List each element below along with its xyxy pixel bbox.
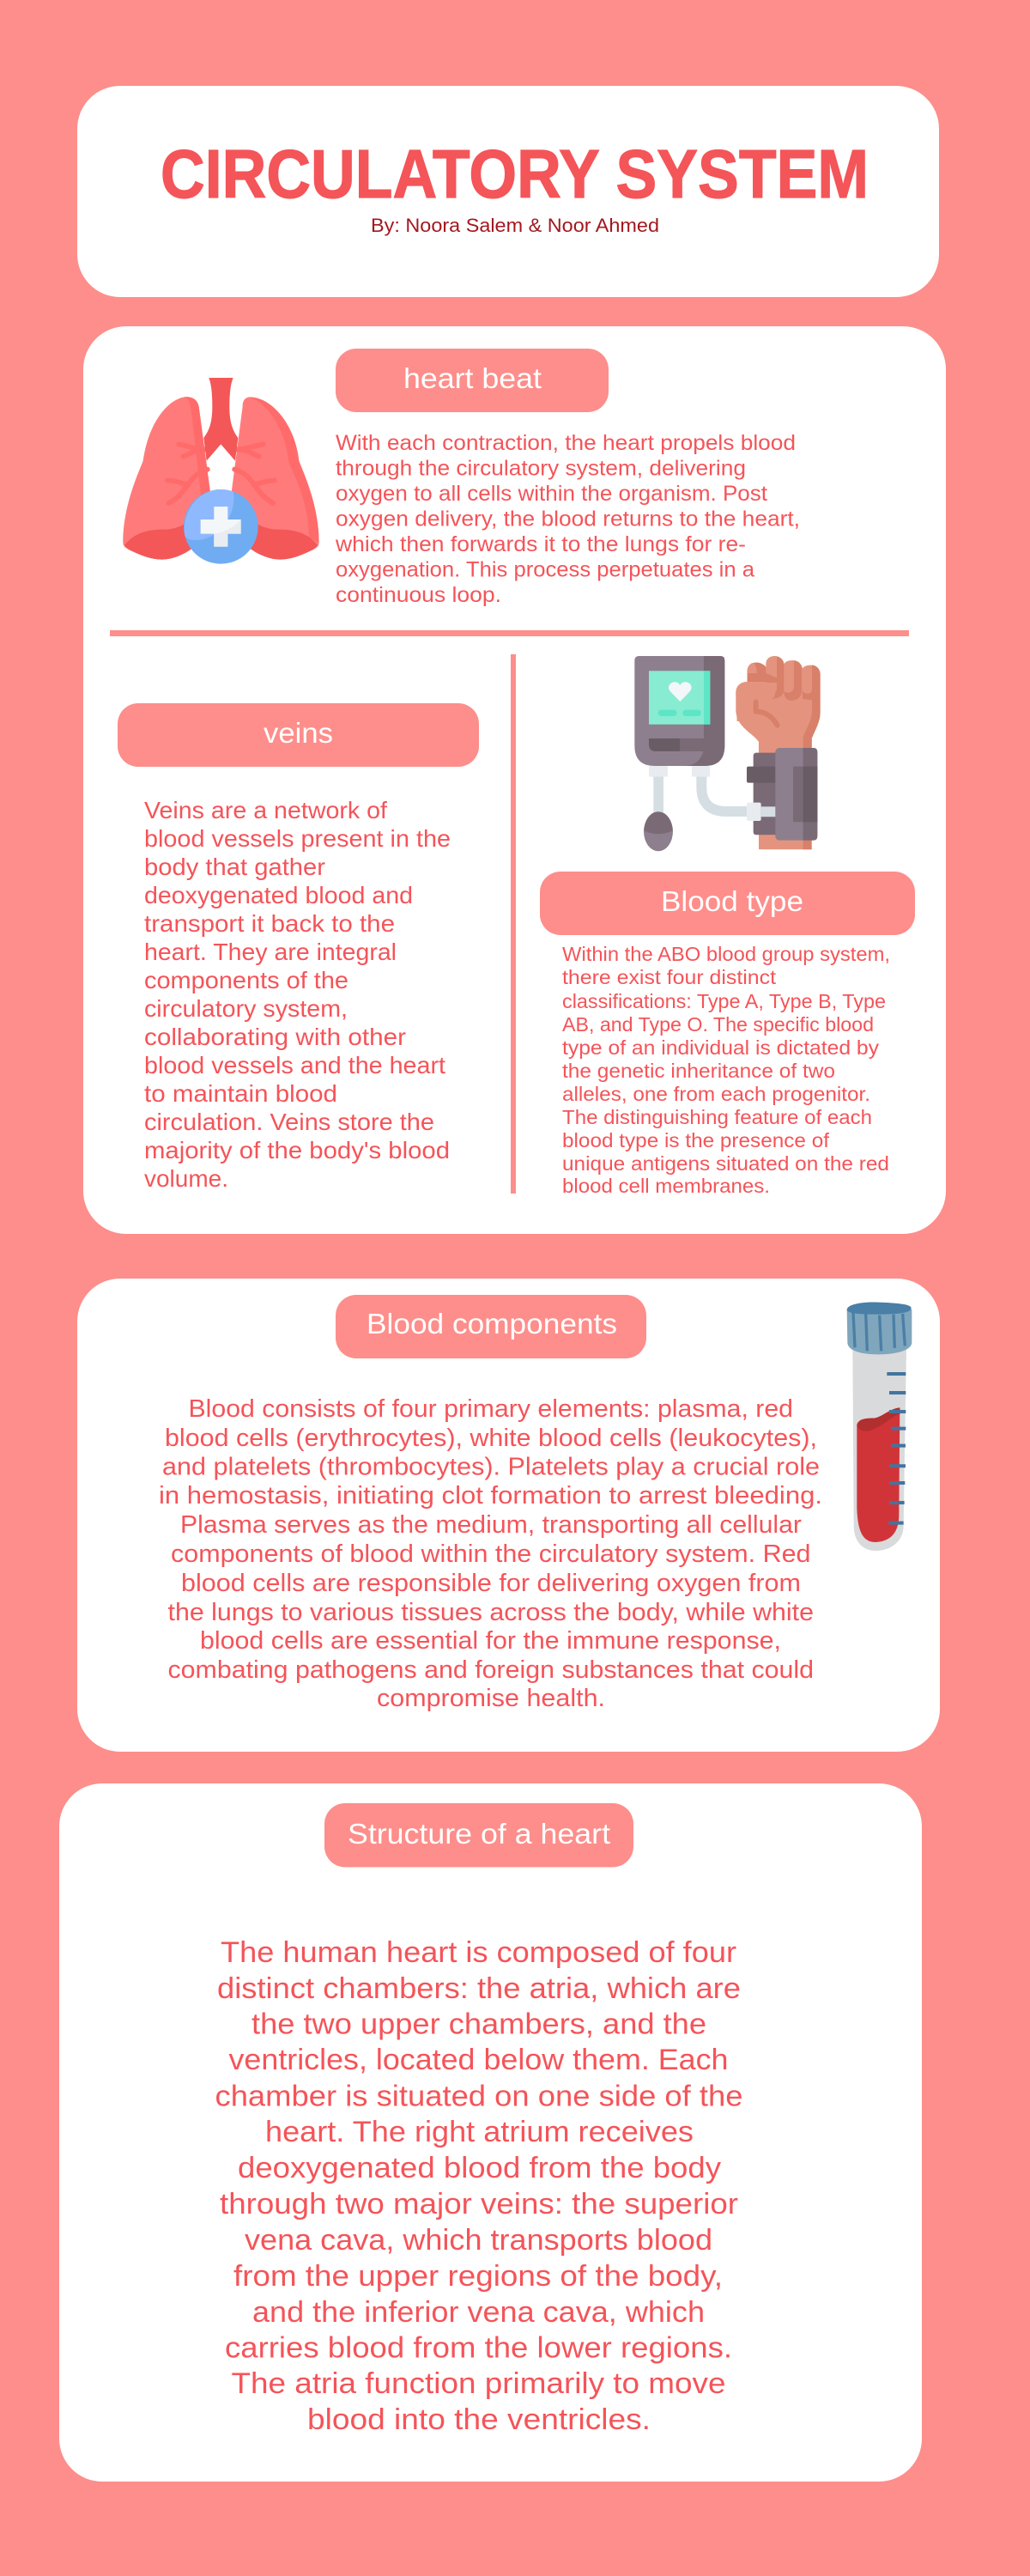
panel: title card [77, 86, 939, 297]
text: blood type description [562, 943, 890, 1197]
text: veins description: collaborating with other [144, 1024, 406, 1050]
text: veins description: Veins are a network of [144, 797, 387, 823]
text: heart beat description: through the circulatory system, delivering [336, 457, 746, 481]
heading: structure of a heart [324, 1803, 633, 1867]
heading: heart beat [336, 349, 609, 412]
text: blood type description: unique antigens situated on the red [562, 1152, 889, 1175]
text: blood components description: and platelets (thrombocytes). Platelets play a crucial role [162, 1453, 820, 1480]
text: blood type description: blood cell membranes. [562, 1175, 770, 1197]
text: structure of a heart description [215, 1936, 743, 2436]
text: heart beat description [335, 431, 800, 607]
heading: blood components: Blood components [367, 1308, 617, 1340]
text: blood components description: in hemostasis, initiating clot formation to arrest bleeding. [159, 1482, 822, 1510]
panel: blood components [77, 1279, 940, 1752]
text: veins description: volume. [144, 1165, 228, 1192]
text: structure of a heart description: blood into the ventricles. [307, 2403, 651, 2436]
text: structure of a heart description: ventricles, located below them. Each [228, 2044, 728, 2076]
title: CIRCULATORY SYSTEM [161, 136, 869, 212]
text: blood components description: the lungs to various tissues across the body, while white [168, 1599, 814, 1626]
text: structure of a heart description: the two upper chambers, and the [251, 2008, 706, 2040]
text: blood type description: AB, and Type O. The specific blood [562, 1013, 874, 1036]
text: heart beat description: oxygen delivery, the blood returns to the heart, [336, 507, 800, 531]
text: structure of a heart description: through two major veins: the superior [220, 2188, 738, 2221]
text: heart beat description: which then forwards it to the lungs for re- [335, 532, 746, 556]
text: veins description: circulatory system, [144, 995, 348, 1022]
heading: structure of a heart: Structure of a heart [348, 1818, 610, 1850]
text: structure of a heart description: chamber is situated on one side of the [215, 2080, 743, 2112]
heading: blood components [336, 1295, 646, 1358]
text: blood components description: combating pathogens and foreign substances that could [168, 1656, 814, 1684]
text: blood components description: Blood consists of four primary elements: plasma, red [189, 1395, 793, 1423]
text: structure of a heart description: distinct chambers: the atria, which are [217, 1972, 741, 2005]
text: blood type description: alleles, one from each progenitor. [562, 1083, 870, 1105]
text: heart beat description: oxygen to all cells within the organism. Post [336, 482, 767, 506]
text: structure of a heart description: vena cava, which transports blood [245, 2224, 712, 2257]
panel: structure of a heart [59, 1783, 922, 2482]
text: blood type description: type of an individual is dictated by [562, 1036, 880, 1059]
text: blood components description: blood cells are responsible for delivering oxygen from [181, 1570, 801, 1597]
text: blood components description: Plasma serves as the medium, transporting all cellular [180, 1511, 803, 1539]
heading: veins: veins [264, 717, 333, 749]
icon: blood pressure monitor and fist [634, 656, 821, 851]
text: blood type description: The distinguishing feature of each [562, 1106, 872, 1128]
text: veins description [144, 797, 451, 1192]
text: structure of a heart description: carries blood from the lower regions. [225, 2332, 732, 2365]
text: veins description: circulation. Veins store the [144, 1109, 434, 1135]
text: blood type description: blood type is the presence of [562, 1129, 830, 1151]
text: veins description: to maintain blood [144, 1080, 337, 1107]
text: structure of a heart description: The human heart is composed of four [221, 1936, 736, 1969]
text: structure of a heart description: The atria function primarily to move [232, 2367, 726, 2400]
heading: blood type [540, 872, 915, 935]
text: structure of a heart description: from the upper regions of the body, [233, 2260, 723, 2293]
text: blood components description: blood cells (erythrocytes), white blood cells (leukocytes), [165, 1425, 817, 1452]
text: blood type description: there exist four distinct [562, 966, 777, 988]
text: heart beat description: oxygenation. This process perpetuates in a [336, 558, 754, 582]
icon: test tube with blood [847, 1303, 912, 1551]
byline: By: Noora Salem & Noor Ahmed [371, 215, 659, 236]
text: veins description: majority of the body's blood [144, 1137, 450, 1163]
text: blood components description: components of blood within the circulatory system. Red [171, 1540, 810, 1568]
panel: heart beat, veins and blood type [83, 326, 946, 1234]
heading: heart beat: heart beat [403, 362, 542, 394]
text: veins description: body that gather [144, 854, 325, 880]
text: blood type description: the genetic inheritance of two [562, 1060, 835, 1082]
text: veins description: blood vessels present in the [144, 825, 451, 852]
text: veins description: blood vessels and the heart [144, 1052, 445, 1078]
text: veins description: transport it back to the [144, 910, 395, 937]
heading: veins [118, 703, 479, 767]
text: heart beat description: continuous loop. [336, 583, 501, 607]
text: veins description: deoxygenated blood and [144, 882, 413, 908]
text: structure of a heart description: deoxygenated blood from the body [238, 2152, 721, 2184]
text: blood components description: blood cells are essential for the immune response, [200, 1627, 781, 1655]
text: blood components description [159, 1395, 822, 1712]
text: veins description: heart. They are integral [144, 939, 397, 965]
text: blood type description: classifications: Type A, Type B, Type [562, 990, 886, 1012]
text: structure of a heart description: heart. The right atrium receives [265, 2116, 694, 2148]
text: structure of a heart description: and the inferior vena cava, which [252, 2296, 705, 2329]
text: heart beat description: With each contraction, the heart propels blood [336, 431, 796, 455]
heading: blood type: Blood type [661, 885, 803, 917]
text: blood components description: compromise health. [377, 1685, 605, 1712]
text: veins description: components of the [144, 967, 348, 993]
icon: lungs with medical cross [123, 378, 319, 564]
text: blood type description: Within the ABO blood group system, [562, 943, 890, 965]
